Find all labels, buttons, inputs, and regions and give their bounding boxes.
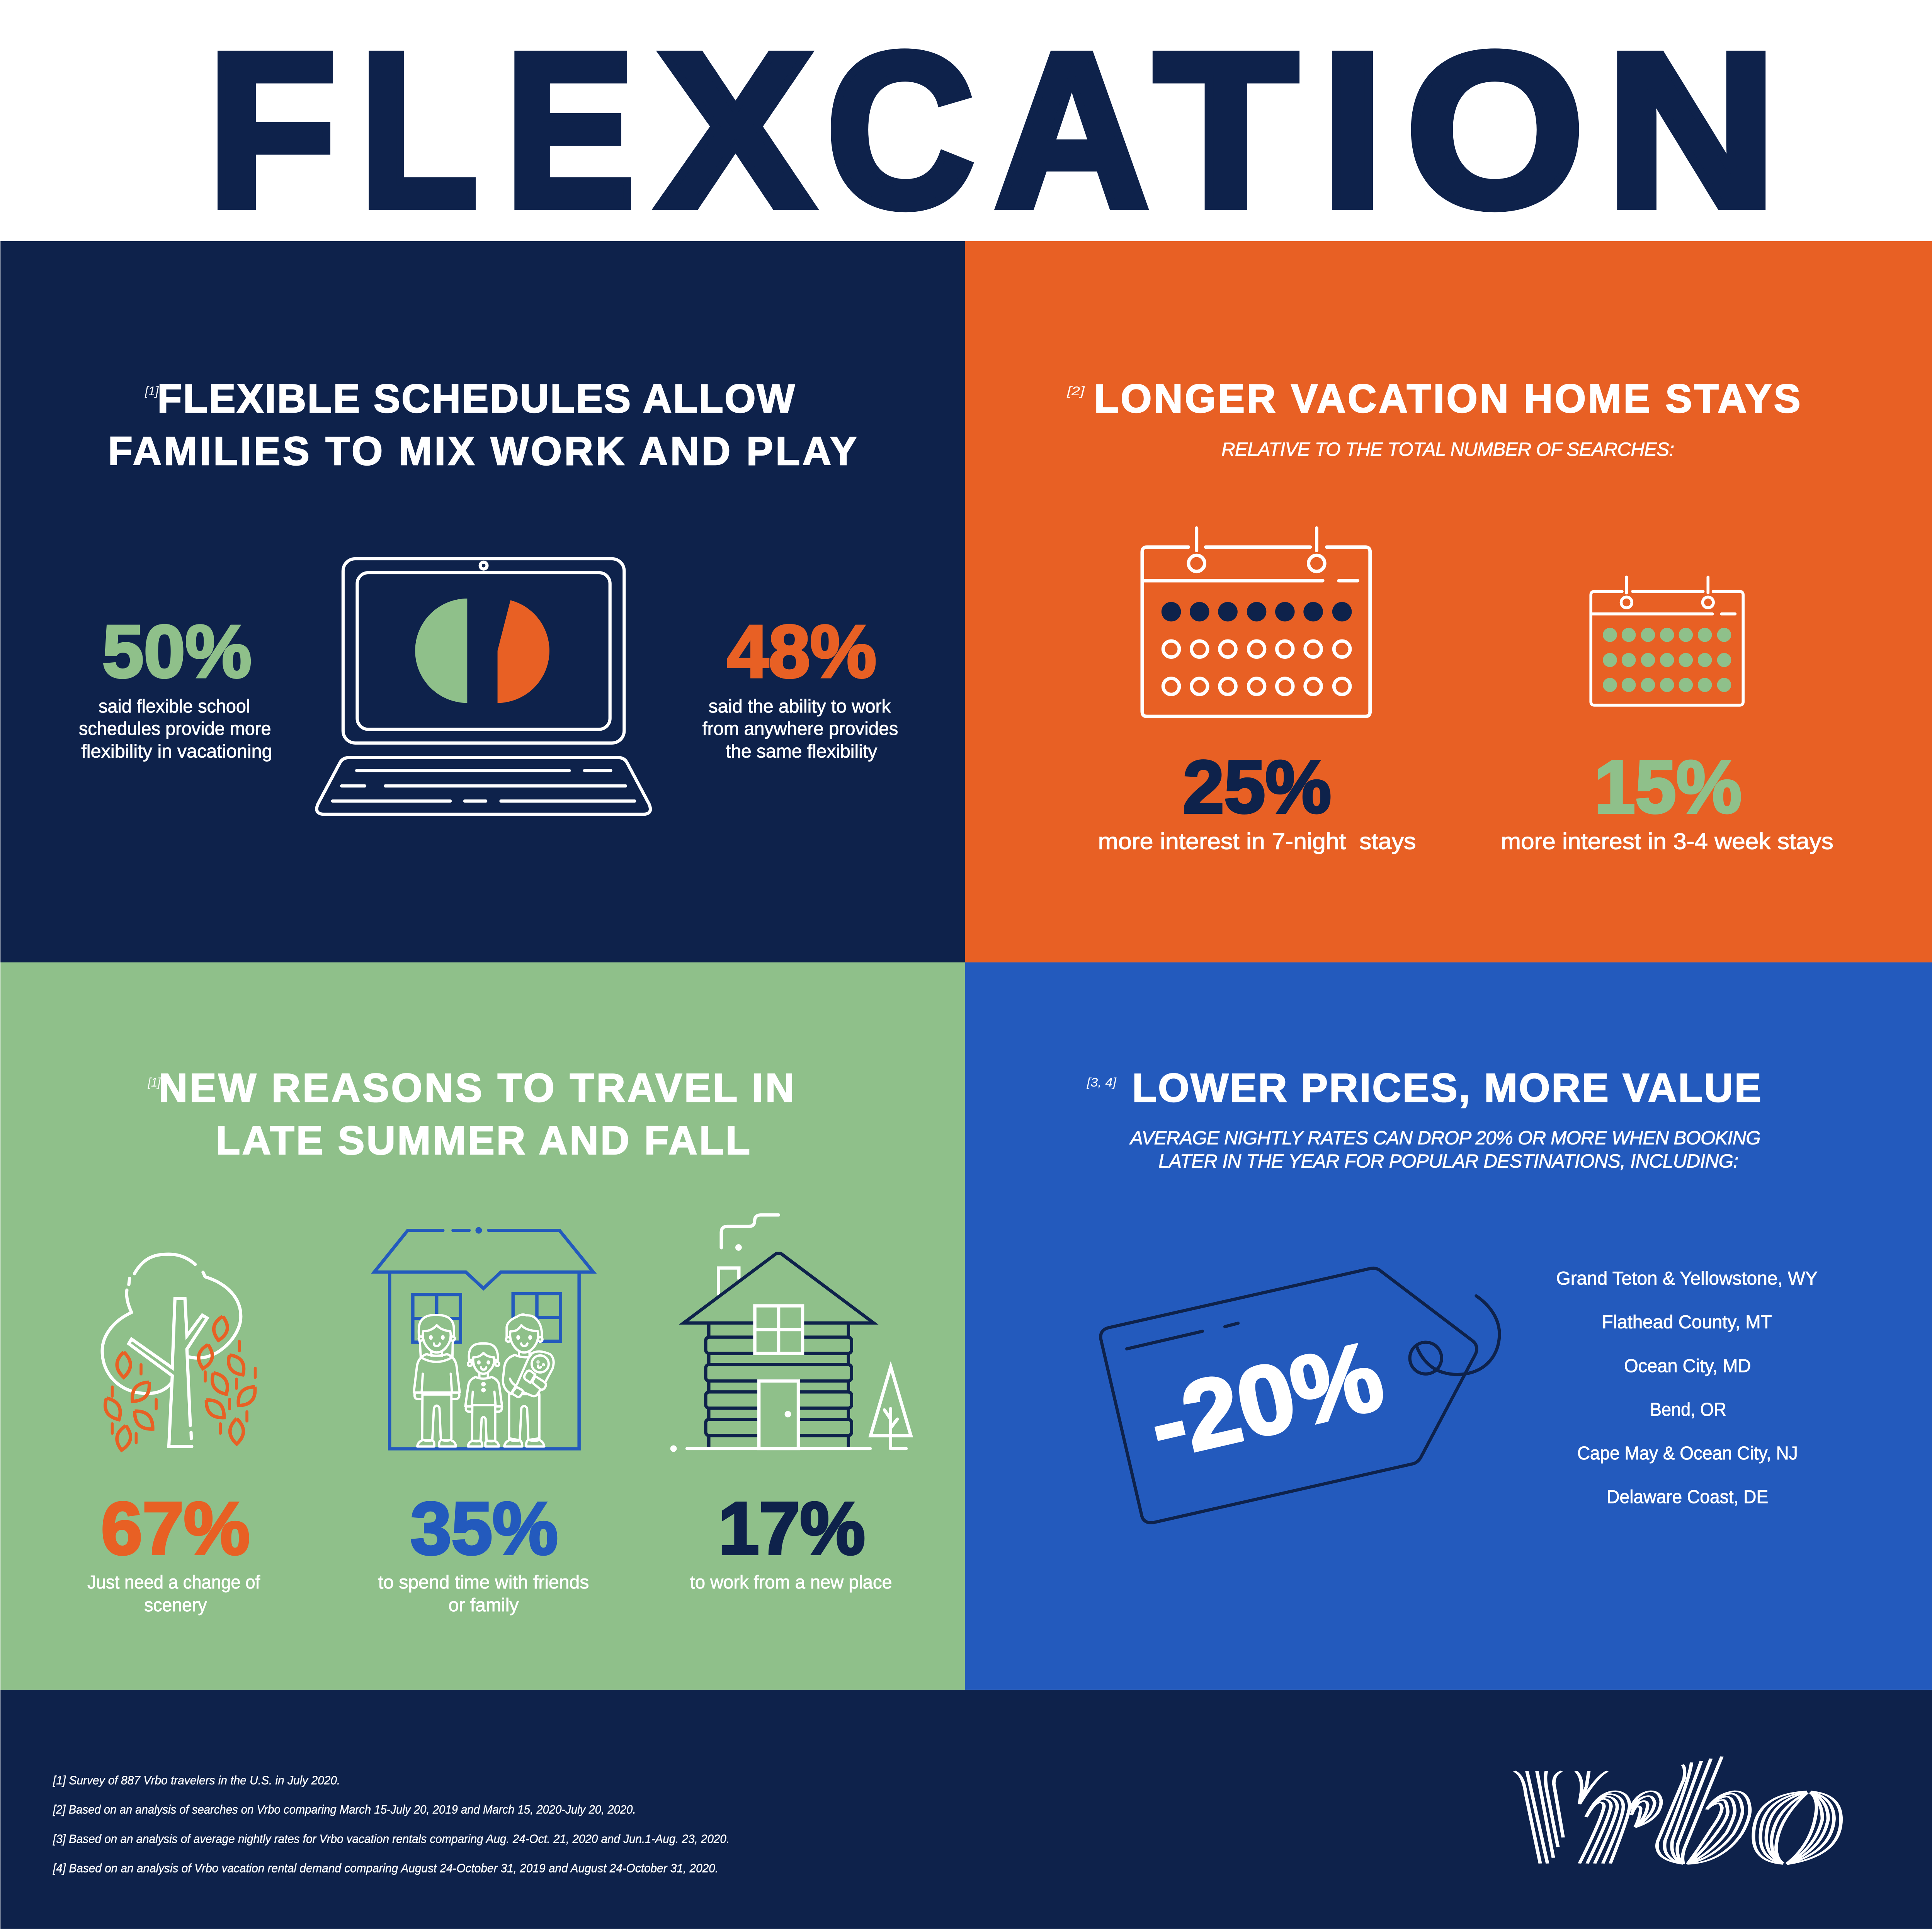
stat: 67 percent: scenery	[144, 1595, 207, 1616]
stat: 17 percent	[690, 1487, 892, 1593]
footnotes	[53, 1773, 730, 1875]
title: O	[1406, 8, 1584, 253]
stat: 50 percent: schedules provide more	[79, 719, 271, 739]
stat: 15 percent	[1501, 745, 1833, 854]
footnotes: [1] Survey of 887 Vrbo travelers in the U.S. in July 2020.	[53, 1773, 340, 1787]
icon: family in house	[374, 1227, 593, 1449]
panel: longer stays	[965, 241, 1932, 963]
stat: 15 percent: 15%	[1594, 745, 1742, 828]
panel: flexible schedules	[0, 241, 965, 963]
footnotes: [4] Based on an analysis of Vrbo vacation rental demand comparing August 24-October 31, 2019 and August 24-October 31, 2020.	[53, 1861, 718, 1875]
title: L	[359, 8, 478, 253]
stat: 17 percent: to work from a new place	[690, 1572, 892, 1593]
panel: lower prices	[965, 963, 1932, 1690]
stat: 25 percent: 25%	[1183, 745, 1331, 828]
figure: mother	[414, 1315, 460, 1446]
subheading: relative: RELATIVE TO THE TOTAL NUMBER OF SEARCHES:	[1221, 439, 1674, 460]
heading: lower prices: [3, 4]	[1087, 1075, 1117, 1089]
stat: 35 percent: or family	[449, 1595, 519, 1616]
stat: 15 percent: more interest in 3-4 week stays	[1501, 828, 1833, 854]
panel: footer	[0, 1690, 1932, 1929]
stat: 67 percent: 67%	[101, 1487, 250, 1570]
subheading: average nightly rates: AVERAGE NIGHTLY RATES CAN DROP 20% OR MORE WHEN BOOKING	[1129, 1128, 1761, 1149]
footnotes: [3] Based on an analysis of average nightly rates for Vrbo vacation rentals comparing Aug. 24-Oct. 21, 2020 and Jun.1-Aug. 23, 2020.	[53, 1832, 730, 1846]
list: destinations: Ocean City, MD	[1624, 1356, 1751, 1376]
heading: longer stays: [2]	[1066, 384, 1085, 398]
icon: log cabin	[670, 1215, 911, 1452]
figure: child	[465, 1344, 502, 1446]
tag value: -20%	[1139, 1320, 1393, 1480]
heading: new reasons: [1]	[148, 1075, 161, 1089]
title: I	[1321, 8, 1384, 253]
title: E	[505, 8, 635, 253]
list: destinations: Bend, OR	[1650, 1400, 1726, 1420]
list: destinations	[1556, 1269, 1818, 1507]
stat: 25 percent	[1098, 745, 1416, 854]
icon: laptop with pie chart	[317, 559, 650, 814]
stat: 48 percent: said the ability to work	[709, 696, 891, 717]
heading: flexible schedules: FLEXIBLE SCHEDULES ALLOW	[157, 376, 795, 421]
stat: 48 percent	[702, 610, 898, 762]
stat: 35 percent: 35%	[410, 1487, 558, 1570]
icon: small calendar	[1591, 577, 1743, 705]
stat: 48 percent: the same flexibility	[726, 742, 877, 762]
stat: 48 percent: from anywhere provides	[702, 719, 898, 739]
stat: 50 percent: 50%	[102, 610, 252, 693]
stat: 17 percent: 17%	[718, 1487, 865, 1570]
title: N	[1606, 8, 1777, 253]
title: A	[995, 8, 1149, 253]
icon: large calendar	[1142, 528, 1370, 716]
list: destinations: Delaware Coast, DE	[1607, 1487, 1768, 1507]
icon: price tag	[1101, 1268, 1499, 1523]
stat: 35 percent: to spend time with friends	[378, 1572, 589, 1593]
title: F	[207, 8, 337, 253]
heading: longer stays: LONGER VACATION HOME STAYS	[1094, 376, 1801, 421]
figure: father with baby	[503, 1315, 554, 1446]
stat: 50 percent: said flexible school	[99, 696, 250, 717]
panel: new reasons	[0, 963, 965, 1690]
heading: new reasons: NEW REASONS TO TRAVEL IN	[158, 1065, 794, 1110]
footnotes: [2] Based on an analysis of searches on Vrbo comparing March 15-July 20, 2019 and March 15, 2020-July 20, 2020.	[53, 1803, 636, 1816]
stat: 67 percent: Just need a change of	[87, 1572, 260, 1593]
stat: 48 percent: 48%	[727, 610, 876, 693]
stat: 67 percent	[87, 1487, 260, 1616]
logo: Vrbo	[1514, 1757, 1841, 1864]
stat: 50 percent: flexibility in vacationing	[81, 742, 272, 762]
icon: autumn tree	[101, 1254, 260, 1451]
list: destinations: Grand Teton & Yellowstone, WY	[1556, 1269, 1818, 1289]
title: C	[826, 8, 975, 253]
title: X	[658, 8, 815, 253]
list: destinations: Flathead County, MT	[1602, 1312, 1772, 1333]
subheading: average nightly rates	[1129, 1128, 1761, 1172]
heading: lower prices: LOWER PRICES, MORE VALUE	[1132, 1065, 1761, 1110]
stat: 25 percent: more interest in 7-night stays	[1098, 828, 1416, 854]
stat: 50 percent	[79, 610, 272, 762]
heading: new reasons	[148, 1065, 794, 1163]
stat: 35 percent	[378, 1487, 589, 1616]
title: T	[1154, 8, 1298, 253]
subheading: average nightly rates: LATER IN THE YEAR FOR POPULAR DESTINATIONS, INCLUDING:	[1158, 1151, 1738, 1172]
heading: flexible schedules: [1]	[145, 384, 159, 398]
list: destinations: Cape May & Ocean City, NJ	[1577, 1443, 1798, 1464]
heading: new reasons: LATE SUMMER AND FALL	[216, 1118, 750, 1163]
heading: flexible schedules	[108, 376, 857, 473]
heading: flexible schedules: FAMILIES TO MIX WORK AND PLAY	[108, 429, 857, 473]
